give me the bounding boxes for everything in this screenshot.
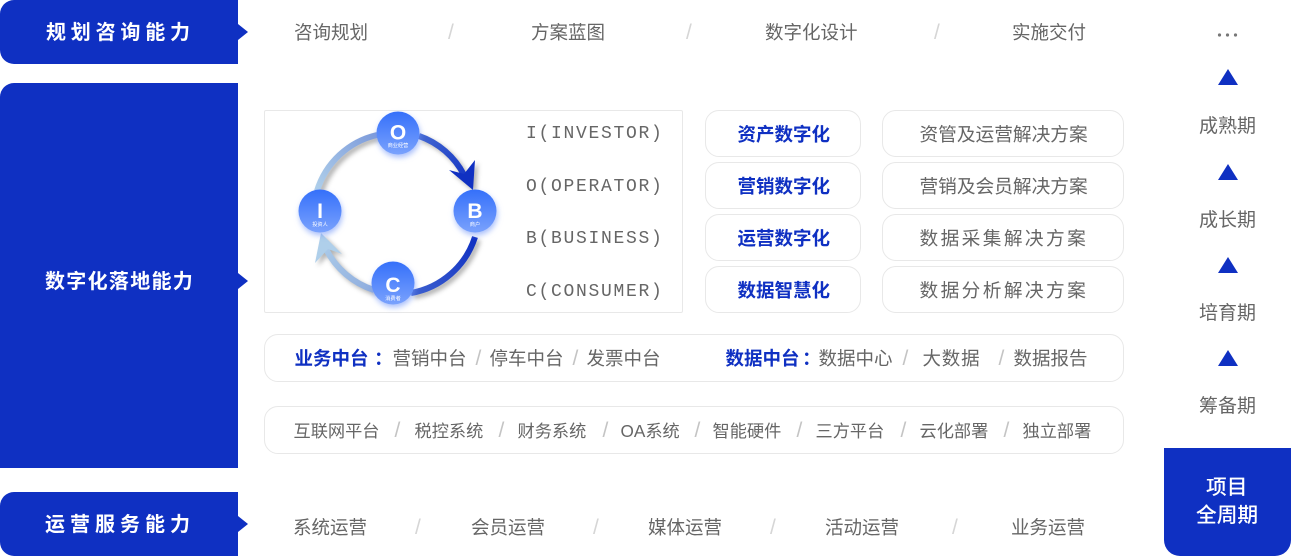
panel: middle platform bar: ： <box>370 346 388 372</box>
text: role labels: B(BUSINESS) <box>526 229 664 249</box>
node: B: 商户 <box>470 220 480 228</box>
button: asset digitalization <box>705 110 861 157</box>
text row: operation items: 会员运营 <box>471 517 545 538</box>
panel: middle platform bar: 发票中台 <box>586 348 661 369</box>
node: O: O <box>390 122 406 144</box>
heading: digital landing: 数字化落地能力 <box>45 271 194 293</box>
panel: digital landing capability <box>0 83 238 468</box>
node: B <box>454 190 496 232</box>
text row: planning items: 咨询规划 <box>294 22 368 43</box>
text row: planning items <box>294 21 1086 44</box>
button: marketing solution <box>882 162 1124 209</box>
button: data analysis solution <box>882 266 1124 313</box>
panel: middle platform bar: 数据中心 <box>818 348 893 369</box>
panel: middle platform bar <box>264 334 1124 382</box>
text: incubation stage: 培育期 <box>1199 303 1256 324</box>
panel: systems bar: / <box>602 419 608 442</box>
text: preparation stage: 筹备期 <box>1199 396 1256 417</box>
text row: planning items: / <box>448 21 454 44</box>
button: asset solution: 资管及运营解决方案 <box>920 124 1088 145</box>
panel: middle platform bar: 大数据 <box>922 348 980 369</box>
panel: middle platform bar: 数据中台 <box>726 348 800 369</box>
text row: planning items: 方案蓝图 <box>531 22 605 43</box>
button: data collection solution <box>882 214 1124 261</box>
node: C <box>372 262 414 304</box>
text: whole cycle: 全周期 <box>1196 504 1258 527</box>
arrow: up to preparation <box>1218 350 1238 366</box>
text row: operation items: 系统运营 <box>293 517 367 538</box>
panel: systems bar: 独立部署 <box>1022 421 1091 441</box>
heading: planning consulting: 规划咨询能力 <box>46 22 195 44</box>
text row: planning items: 实施交付 <box>1012 22 1086 43</box>
text: role labels <box>526 124 664 302</box>
node: I: 投资人 <box>312 220 328 228</box>
text row: operation items: / <box>952 516 958 539</box>
arc: B to C <box>411 237 475 293</box>
arrow: up to mature <box>1218 69 1238 85</box>
text row: operation items: / <box>415 516 421 539</box>
panel: systems bar: / <box>498 419 504 442</box>
text: role labels: O(OPERATOR) <box>526 177 664 197</box>
node: B: B <box>467 200 483 223</box>
node: C: 消费者 <box>385 294 401 302</box>
panel: systems bar: / <box>694 419 700 442</box>
panel: systems bar: / <box>796 419 802 442</box>
node: O <box>376 112 420 154</box>
arrow: operation service <box>238 516 248 532</box>
text: growth stage: 成长期 <box>1199 210 1256 231</box>
arc: O to B with arrow <box>419 136 475 190</box>
button: asset digitalization: 资产数字化 <box>738 124 830 145</box>
button: data intelligence: 数据智慧化 <box>738 280 830 301</box>
text row: operation items: 业务运营 <box>1011 517 1085 538</box>
panel: middle platform bar: / <box>998 347 1004 370</box>
text row: planning items: 数字化设计 <box>765 22 858 43</box>
button: operations digitalization: 运营数字化 <box>738 228 830 249</box>
node: C: C <box>385 274 401 297</box>
panel: middle platform bar: / <box>572 347 578 370</box>
node: I: I <box>317 200 323 223</box>
panel: middle platform bar: 停车中台 <box>490 348 564 369</box>
text: role labels: I(INVESTOR) <box>526 124 664 144</box>
icon: ellipsis <box>1218 33 1238 37</box>
panel: systems bar: / <box>394 419 400 442</box>
button: marketing solution: 营销及会员解决方案 <box>920 176 1088 197</box>
panel: operation service capability <box>0 492 238 556</box>
panel: OBCI cycle <box>264 110 683 313</box>
button: asset solution <box>882 110 1124 157</box>
button: marketing digitalization <box>705 162 861 209</box>
text: role labels: C(CONSUMER) <box>526 282 664 302</box>
text row: operation items: / <box>770 516 776 539</box>
arc: I to O <box>317 135 377 191</box>
panel: systems bar: / <box>900 419 906 442</box>
panel: middle platform bar: 营销中台 <box>392 348 467 369</box>
button: data analysis solution: 数据分析解决方案 <box>920 280 1088 301</box>
text row: operation items: 活动运营 <box>825 517 899 538</box>
panel: systems bar: OA系统 <box>620 421 680 441</box>
button: data intelligence <box>705 266 861 313</box>
arrow: digital landing <box>238 273 248 289</box>
text row: operation items: 媒体运营 <box>648 517 722 538</box>
heading: operation service: 运营服务能力 <box>45 514 195 536</box>
node: I <box>298 190 342 232</box>
panel: systems bar <box>264 406 1124 454</box>
panel: systems bar: 互联网平台 <box>294 421 379 441</box>
panel: middle platform bar: ： <box>798 346 816 372</box>
button: operations digitalization <box>705 214 861 261</box>
button: data collection solution: 数据采集解决方案 <box>920 228 1088 249</box>
panel: middle platform bar: / <box>476 347 481 370</box>
panel: systems bar: 财务系统 <box>518 421 586 441</box>
panel: planning consulting capability <box>0 0 238 64</box>
panel: middle platform bar: 数据报告 <box>1014 348 1088 369</box>
panel: systems bar: 税控系统 <box>414 421 483 441</box>
arrow: up to growth <box>1218 164 1238 180</box>
arc: C to I with arrow <box>315 233 374 290</box>
text row: operation items <box>293 516 1085 539</box>
node: O: 商业经营 <box>388 141 408 149</box>
arrow: planning <box>238 24 248 40</box>
panel: middle platform bar: / <box>902 347 908 370</box>
text row: operation items: / <box>593 516 599 539</box>
text row: planning items: / <box>686 21 692 44</box>
panel: systems bar: 云化部署 <box>920 421 988 441</box>
button: marketing digitalization: 营销数字化 <box>738 176 830 197</box>
chart: OBCI cycle diagram <box>296 111 501 311</box>
panel: whole project lifecycle <box>1164 448 1291 556</box>
text: project: 项目 <box>1206 476 1247 499</box>
text: mature stage: 成熟期 <box>1199 116 1256 137</box>
arrow: up to incubation <box>1218 257 1238 273</box>
panel: systems bar: / <box>1004 419 1009 442</box>
text row: planning items: / <box>934 21 940 44</box>
panel: systems bar: 智能硬件 <box>712 421 781 441</box>
panel: middle platform bar: 业务中台 <box>294 348 369 369</box>
panel: systems bar: 三方平台 <box>816 421 884 441</box>
